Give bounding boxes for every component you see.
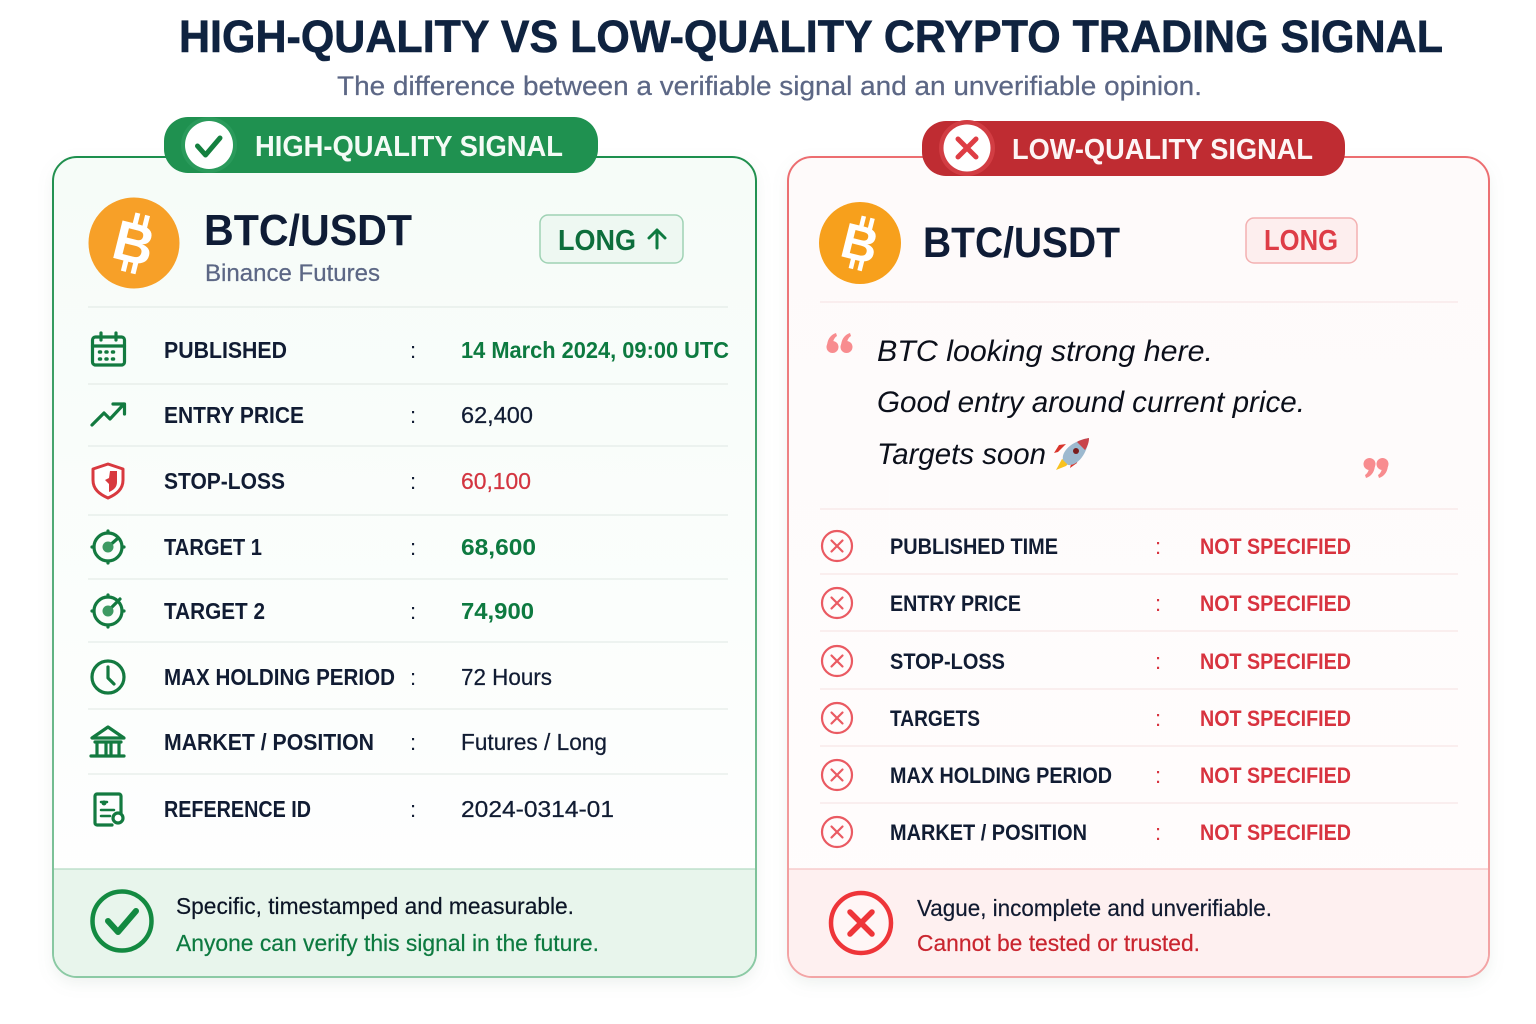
row: market / position (91, 727, 607, 756)
row: max holding period: 72 Hours (461, 664, 552, 690)
row: stop-loss: 60,100 (461, 468, 531, 494)
icon: x circle (822, 646, 852, 676)
row: reference id: 2024-0314-01 (461, 796, 614, 822)
icon: x circle (822, 760, 852, 790)
icon: shield (93, 464, 123, 498)
row: reference id: : (410, 797, 416, 822)
row: max holding period (92, 661, 552, 693)
callout: high-quality summary: Anyone can verify this signal in the future. (176, 930, 599, 956)
callout: high-quality summary (92, 892, 599, 956)
icon: target (92, 595, 124, 627)
row: market / position: : (1155, 820, 1161, 845)
row: target 1: 68,600 (461, 534, 536, 560)
row: stop-loss: : (1155, 649, 1161, 674)
row: published time: : (1155, 534, 1161, 559)
row: entry price: ENTRY PRICE (890, 591, 1021, 616)
footer background: low-quality (789, 869, 1488, 976)
row: max holding period: : (1155, 763, 1161, 788)
subtitle: The difference between a verifiable signal and an unverifiable opinion. (337, 71, 1202, 101)
row: published (92, 333, 729, 365)
row: published time: NOT SPECIFIED (1200, 534, 1351, 559)
row: entry price: ENTRY PRICE (164, 402, 304, 428)
row: entry price: : (410, 403, 416, 428)
row: reference id: REFERENCE ID (164, 796, 311, 822)
row: market / position: MARKET / POSITION (164, 729, 374, 755)
panel: low-quality signal (788, 120, 1489, 977)
row: stop-loss (822, 646, 1351, 676)
direction tag: long: LONG (558, 225, 636, 257)
callout: high-quality summary: Specific, timestamped and measurable. (176, 893, 574, 919)
row: entry price: 62,400 (461, 402, 533, 428)
row: market / position: MARKET / POSITION (890, 820, 1087, 845)
icon: calendar (92, 333, 124, 365)
row: targets (822, 703, 1351, 733)
callout: low-quality summary: Cannot be tested or trusted. (917, 930, 1200, 956)
quote block (826, 333, 1388, 478)
quote block: BTC looking strong here. (877, 335, 1213, 368)
row: stop-loss (93, 464, 531, 498)
icon: target (92, 531, 124, 563)
row: max holding period: MAX HOLDING PERIOD (164, 664, 395, 690)
row: max holding period: MAX HOLDING PERIOD (890, 763, 1112, 788)
row: published: PUBLISHED (164, 337, 287, 363)
icon: bitcoin coin: B (107, 208, 161, 278)
row: stop-loss: : (410, 469, 416, 494)
row: target 2: TARGET 2 (164, 598, 265, 624)
direction tag: long (1246, 218, 1357, 263)
row: published time (822, 531, 1351, 561)
icon: x circle (822, 817, 852, 847)
icon: x circle large (831, 893, 891, 953)
row: max holding period (822, 760, 1351, 790)
exchange: Binance Futures (205, 260, 380, 287)
row: targets: NOT SPECIFIED (1200, 706, 1351, 731)
icon: check circle (92, 892, 152, 950)
icon: rocket (1054, 438, 1089, 470)
icon: x circle (822, 531, 852, 561)
row: target 2: : (410, 599, 416, 624)
row: published: 14 March 2024, 09:00 UTC (461, 337, 729, 363)
callout: low-quality summary: Vague, incomplete and unverifiable. (917, 895, 1272, 921)
footer background: high-quality (54, 869, 755, 976)
row: entry price (92, 402, 533, 428)
row: entry price: NOT SPECIFIED (1200, 591, 1351, 616)
row: published: : (410, 338, 416, 363)
pair name: BTC/USDT (204, 206, 412, 255)
badge: low-quality signal (922, 120, 1345, 176)
row: targets: : (1155, 706, 1161, 731)
pair name: BTC/USDT (923, 219, 1120, 267)
badge: high-quality signal: HIGH-QUALITY SIGNAL (255, 131, 563, 163)
row: stop-loss: STOP-LOSS (164, 468, 285, 494)
row: market / position (822, 817, 1351, 847)
row: reference id (95, 794, 614, 825)
row: market / position: : (410, 730, 416, 755)
badge: high-quality signal (164, 117, 598, 173)
quote block: Good entry around current price. (877, 386, 1305, 419)
row: target 2: 74,900 (461, 598, 534, 624)
icon: x circle (822, 703, 852, 733)
row: targets: TARGETS (890, 706, 980, 731)
icon: document (95, 794, 123, 825)
row: market / position: NOT SPECIFIED (1200, 820, 1351, 845)
icon: trend arrow (92, 404, 124, 425)
icon: x circle (822, 588, 852, 618)
direction tag: long: LONG (1264, 225, 1338, 257)
icon: bitcoin coin (88, 198, 180, 288)
quote block: Targets soon (877, 438, 1046, 471)
row: published time: PUBLISHED TIME (890, 534, 1058, 559)
icon: bank (91, 727, 124, 756)
row: market / position: Futures / Long (461, 729, 607, 755)
row: target 1: : (410, 535, 416, 560)
icon: closing quote (1364, 458, 1388, 478)
title: HIGH-QUALITY VS LOW-QUALITY CRYPTO TRADING SIGNAL (179, 11, 1443, 62)
row: max holding period: : (410, 665, 416, 690)
row: entry price: : (1155, 591, 1161, 616)
row: target 2 (92, 595, 534, 627)
row: stop-loss: NOT SPECIFIED (1200, 649, 1351, 674)
row: target 1: TARGET 1 (164, 534, 262, 560)
icon: opening quote (826, 333, 852, 353)
row: entry price (822, 588, 1351, 618)
direction tag: long (540, 215, 683, 263)
badge: low-quality signal: LOW-QUALITY SIGNAL (1012, 134, 1313, 166)
panel: high-quality signal (53, 117, 756, 977)
icon: clock (92, 661, 124, 693)
icon: bitcoin coin: B (836, 212, 884, 275)
icon: bitcoin coin (819, 202, 901, 284)
row: target 1 (92, 531, 536, 563)
callout: low-quality summary (831, 893, 1272, 956)
row: stop-loss: STOP-LOSS (890, 649, 1005, 674)
row: max holding period: NOT SPECIFIED (1200, 763, 1351, 788)
